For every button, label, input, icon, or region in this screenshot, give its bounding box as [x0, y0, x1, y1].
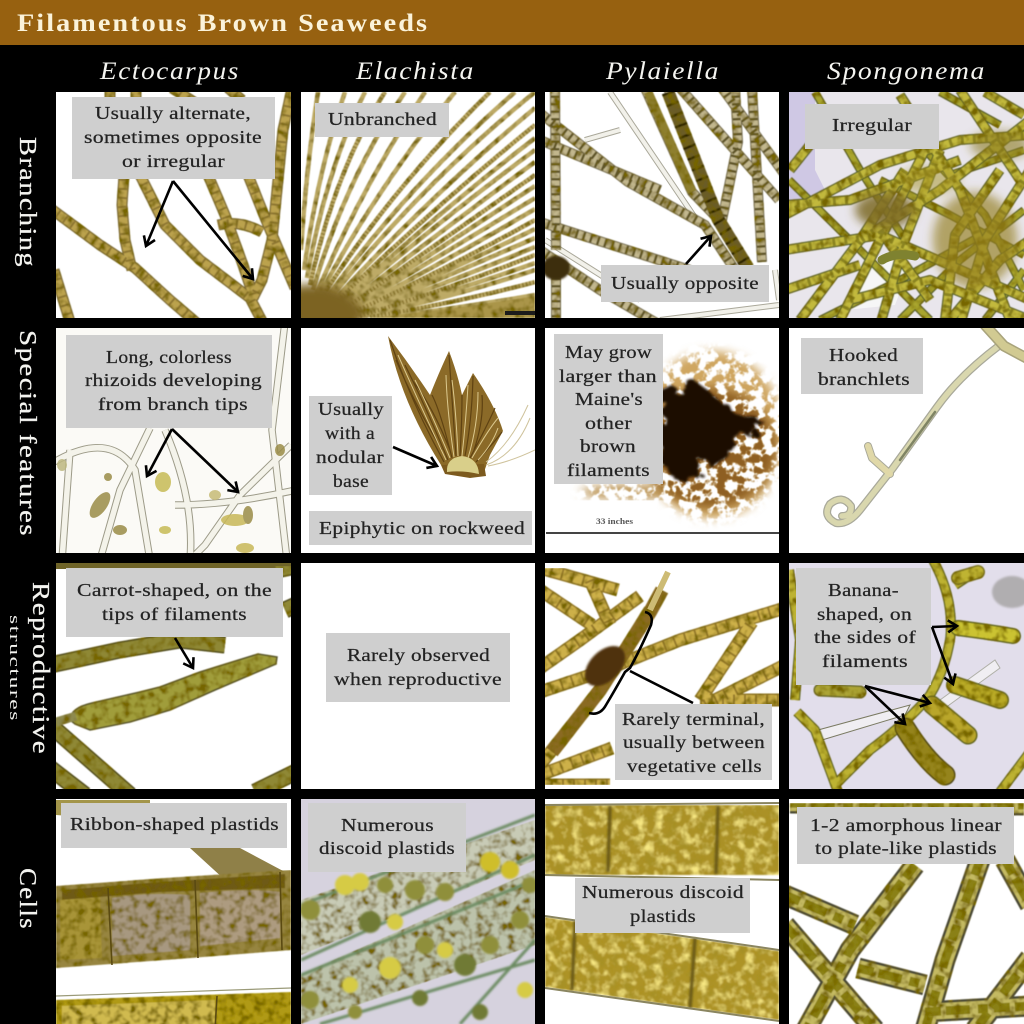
- callout: branching: sometimes opposite: [84, 127, 262, 147]
- callout: banana-shaped: Banana-: [828, 580, 899, 600]
- callout: plate-like plastids: to plate-like plastids: [815, 838, 997, 858]
- callout: nodular base: base: [333, 471, 369, 491]
- callout: branching: [72, 97, 275, 179]
- callout: ribbon-shaped: Ribbon-shaped plastids: [70, 814, 279, 834]
- callout: discoid plastids: plastids: [630, 906, 696, 926]
- callout: ribbon-shaped: [61, 803, 287, 848]
- callout: hooked branchlets: Hooked: [829, 345, 898, 365]
- photo: irregular tangle: [785, 90, 1024, 325]
- column headings: Ectocarpus: [99, 58, 240, 85]
- panel: Elachista cells: [300, 799, 538, 1024]
- column headings: Pylaiella: [605, 58, 720, 85]
- photo: unbranched fan of filaments: [301, 92, 535, 318]
- callout: hooked branchlets: [801, 338, 923, 394]
- callout: rarely terminal: vegetative cells: [627, 756, 762, 776]
- callout: rarely observed: Rarely observed: [347, 645, 490, 665]
- arrows: rhizoid tips: [147, 429, 238, 492]
- callout: nodular base: with a: [325, 423, 375, 443]
- callout: rhizoids: from branch tips: [98, 394, 248, 414]
- row headings: Cells: [14, 868, 40, 930]
- callout: grows larger: Maine's: [575, 389, 643, 409]
- photo: intercalary sporangia: [540, 563, 785, 789]
- arrow: sporangium: [175, 638, 193, 668]
- callout: hooked branchlets: branchlets: [818, 369, 910, 389]
- photo: ribbon-shaped plastids: [56, 799, 291, 1024]
- callout: plate-like plastids: [797, 807, 1014, 864]
- callout: nodular base: nodular: [316, 447, 384, 467]
- callout: irregular: Irregular: [832, 115, 912, 135]
- callout: grows larger: [554, 334, 663, 484]
- photo: numerous discoid plastids: [300, 799, 538, 1024]
- callout: plate-like plastids: 1-2 amorphous linear: [810, 815, 1002, 835]
- row headings: [6, 137, 53, 930]
- row headings: Branching: [14, 137, 40, 268]
- arrows: lateral sporangia: [865, 626, 957, 724]
- panel: Pylaiella special features: [545, 328, 784, 553]
- row headings: Special features: [14, 330, 40, 537]
- blank photo area: [301, 563, 535, 789]
- callout: grows larger: brown: [580, 436, 636, 456]
- title bar: [0, 0, 1024, 45]
- callout: usually opposite: [601, 265, 769, 302]
- photo: carrot-shaped sporangium: [50, 563, 296, 795]
- panel: Elachista reproductive structures: [301, 563, 535, 789]
- callout: rhizoids: rhizoids developing: [85, 370, 262, 390]
- column headings: Spongonema: [827, 58, 986, 85]
- photo: alternate branching filaments: [56, 92, 291, 318]
- panel: Elachista branching: [301, 92, 535, 318]
- bracket: sporangia span: [589, 612, 693, 714]
- callout: epiphytic: [309, 511, 532, 545]
- callout: grows larger: filaments: [567, 460, 650, 480]
- panel: Spongonema branching: [785, 90, 1024, 325]
- panel: Pylaiella branching: [540, 88, 785, 325]
- callout: branching: Usually alternate,: [95, 103, 251, 123]
- callout: banana-shaped: shaped, on: [817, 604, 912, 624]
- callout: carrot-shaped: tips of filaments: [102, 604, 247, 624]
- panel: Pylaiella cells: [545, 799, 779, 1024]
- column headings: [99, 58, 986, 85]
- callout: discoid plastids: [575, 878, 750, 933]
- arrow: opposite branch: [686, 236, 711, 264]
- callout: discoid plastids: Numerous discoid: [582, 882, 744, 902]
- arrows: branch points: [146, 181, 253, 279]
- photo: large dark tuft with scale: [545, 328, 784, 553]
- callout: rhizoids: [66, 335, 272, 428]
- title bar: Filamentous Brown Seaweeds: [17, 10, 429, 37]
- photo: colorless rhizoids: [54, 322, 296, 560]
- callout: discoid plastids: Numerous: [341, 815, 434, 835]
- callout: rarely observed: [326, 633, 510, 702]
- callout: nodular base: Usually: [318, 399, 384, 419]
- callout: nodular base: [309, 396, 392, 495]
- callout: unbranched: Unbranched: [328, 109, 437, 129]
- callout: grows larger: May grow: [565, 342, 652, 362]
- photo: linear to plate-like plastids: [785, 799, 1024, 1024]
- photo: tuft with nodular base: [301, 328, 535, 553]
- panel: Ectocarpus branching: [56, 92, 291, 318]
- callout: grows larger: larger than: [559, 366, 657, 386]
- callout: irregular: [805, 104, 939, 149]
- photo: banana-shaped sporangia: [789, 560, 1024, 792]
- photo: opposite branches: [540, 88, 785, 325]
- column headings: Elachista: [355, 58, 475, 85]
- panel: Spongonema cells: [785, 799, 1024, 1024]
- callout: rarely terminal: Rarely terminal,: [622, 709, 765, 729]
- panel: Spongonema special features: [789, 325, 1024, 553]
- callout: banana-shaped: filaments: [822, 651, 908, 671]
- row headings: Reproductive: [27, 582, 53, 755]
- panel: Ectocarpus special features: [54, 322, 296, 560]
- callout: epiphytic: Epiphytic on rockweed: [319, 518, 525, 538]
- callout: carrot-shaped: Carrot-shaped, on the: [77, 580, 272, 600]
- panel: Elachista special features: [301, 328, 535, 553]
- callout: banana-shaped: [796, 568, 931, 685]
- callout: discoid plastids: discoid plastids: [319, 838, 455, 858]
- callout: rhizoids: Long, colorless: [106, 347, 232, 367]
- panel: Ectocarpus cells: [56, 799, 291, 1024]
- callout: unbranched: [315, 103, 449, 137]
- row headings: structures: [6, 615, 22, 722]
- panel: Pylaiella reproductive structures: [540, 563, 785, 789]
- panel: Ectocarpus reproductive structures: [50, 563, 296, 795]
- arrow: nodular base: [393, 447, 437, 466]
- scale label: 33 inches: [596, 517, 633, 526]
- callout: rarely observed: when reproductive: [334, 669, 502, 689]
- callout: carrot-shaped: [66, 568, 283, 637]
- photo: hooked branchlet: [789, 325, 1024, 553]
- panel: Spongonema reproductive structures: [789, 560, 1024, 792]
- callout: rarely terminal: usually between: [623, 732, 765, 752]
- callout: usually opposite: Usually opposite: [611, 273, 759, 293]
- callout: grows larger: other: [585, 413, 632, 433]
- callout: discoid plastids: [308, 803, 466, 872]
- callout: branching: or irregular: [122, 151, 225, 171]
- callout: banana-shaped: the sides of: [814, 627, 916, 647]
- photo: golden cells with discoid plastids: [545, 799, 779, 1024]
- callout: rarely terminal: [615, 704, 772, 780]
